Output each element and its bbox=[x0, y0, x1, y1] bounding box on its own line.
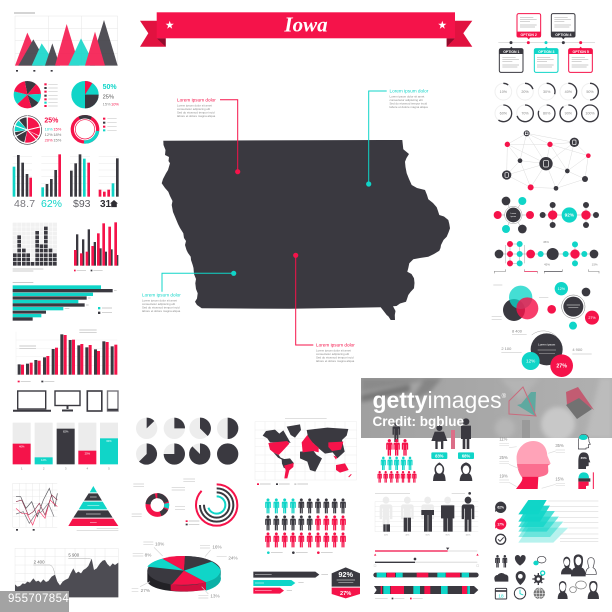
3D pie chart: 10% bbox=[155, 542, 164, 547]
pie charts: 50% bbox=[103, 84, 117, 91]
bubble summary: Lorem ipsum bbox=[538, 342, 556, 346]
pie charts: 15% bbox=[53, 137, 62, 142]
circular progress gauges: 30% bbox=[543, 90, 551, 94]
bubble summary: 12% bbox=[526, 359, 535, 364]
paired bar chart bbox=[74, 222, 118, 271]
stacked column chart: 5 bbox=[108, 466, 110, 470]
circular progress gauges: 100% bbox=[585, 112, 595, 116]
area line chart bbox=[15, 548, 118, 597]
watermark band background bbox=[361, 378, 612, 441]
callout: top left: Lorem ipsum dolor sit amet bbox=[177, 104, 212, 108]
arrow bars with hexagon bbox=[253, 567, 360, 598]
stacked column chart: 3 bbox=[65, 466, 67, 470]
watermark text bbox=[372, 387, 507, 429]
stacked column chart: 1 bbox=[21, 466, 23, 470]
people pyramid and gender comparison: 83% bbox=[435, 453, 444, 458]
venn diagram bbox=[492, 285, 548, 321]
image id strip: 955707854 bbox=[8, 593, 69, 605]
big numbers: $93 bbox=[73, 198, 91, 210]
circle diagrams: 92% bbox=[565, 213, 575, 218]
badges: 62% bbox=[497, 506, 504, 510]
circular progress gauges bbox=[495, 83, 598, 122]
3D pie chart: 27% bbox=[141, 588, 150, 593]
options timeline: OPTION 3 bbox=[538, 50, 555, 54]
3D pie chart: 24% bbox=[228, 555, 238, 560]
watermark text: Credit: bgblue bbox=[372, 414, 464, 429]
big numbers: 62% bbox=[41, 198, 62, 210]
callout: bottom centre: Lorem ipsum dolor bbox=[316, 343, 355, 348]
human figure comparison chart: 60% bbox=[426, 534, 430, 536]
callout: top left: labore et dolore magna aliqua bbox=[177, 114, 216, 118]
circle diagrams: Lorem bbox=[511, 212, 516, 215]
icon set: 18 bbox=[498, 594, 504, 599]
callout: top right: Lorem ipsum dolor bbox=[390, 89, 429, 94]
layered stack chart bbox=[518, 500, 598, 543]
3D pie chart bbox=[132, 542, 238, 598]
callout: top right: Sed do eiusmod tempor incid bbox=[390, 102, 427, 106]
callout: top right bbox=[366, 89, 429, 187]
circular progress gauges: 90% bbox=[565, 112, 573, 116]
people pyramid and gender comparison bbox=[377, 418, 474, 483]
title banner bbox=[140, 12, 472, 47]
human figure comparison chart: 40% bbox=[405, 534, 410, 536]
human figure comparison chart: 100% bbox=[465, 534, 471, 536]
circular progress gauges: 40% bbox=[565, 90, 573, 94]
arrow bars with hexagon: 92% bbox=[338, 570, 353, 579]
callout: lower left: Sed do eiusmod tempor incid bbox=[142, 306, 180, 310]
map of Iowa bbox=[162, 140, 450, 320]
head infographic: 11% bbox=[499, 437, 508, 442]
options timeline: OPTION 4 bbox=[555, 33, 572, 37]
pie charts: 15% bbox=[103, 102, 111, 107]
stacked column chart: 60% bbox=[106, 439, 112, 443]
stacked column chart bbox=[13, 423, 118, 470]
callout: top right: labore et dolore magna aliqua bbox=[390, 105, 428, 109]
big numbers: 31 bbox=[100, 199, 112, 210]
pie charts: 10% bbox=[45, 127, 53, 132]
network diagram bbox=[502, 130, 591, 191]
bubble summary: 2 100 bbox=[501, 346, 512, 351]
head infographic: 35% bbox=[581, 456, 587, 460]
callout: top left: Sed do eiusmod tempor incid bbox=[177, 110, 215, 114]
3D pie chart: 13% bbox=[210, 593, 220, 598]
circle diagrams: 45% bbox=[543, 240, 549, 244]
callout: top right: consectetur adipiscing elit bbox=[390, 98, 423, 102]
horizontal bar chart bbox=[13, 282, 117, 321]
stacked column chart: 40% bbox=[19, 444, 25, 448]
title banner: Iowa bbox=[283, 12, 328, 36]
callout: lower left: Lorem ipsum dolor bbox=[142, 293, 181, 298]
callout: lower left bbox=[142, 271, 236, 313]
people grid chart bbox=[265, 498, 346, 554]
callout: bottom centre bbox=[293, 253, 355, 363]
bubble cluster bbox=[547, 282, 599, 330]
line chart bbox=[13, 483, 57, 531]
callout: bottom centre: Sed do eiusmod tempor incid bbox=[316, 356, 354, 360]
stacked column chart: 2 bbox=[43, 466, 45, 470]
bubble summary: 4 900 bbox=[572, 347, 583, 352]
3D pie chart: 16% bbox=[212, 545, 222, 550]
options timeline: OPTION 2 bbox=[521, 33, 537, 37]
human figure comparison chart: 20% bbox=[384, 534, 388, 536]
pie charts: 12% bbox=[45, 132, 53, 137]
options timeline: OPTION 1 bbox=[503, 50, 520, 54]
stacked column chart: 4 bbox=[86, 466, 88, 470]
area line chart: 5 900 bbox=[68, 553, 80, 558]
circular progress gauges: 60% bbox=[500, 112, 508, 116]
donut chart bbox=[132, 484, 185, 517]
callout: bottom centre: Lorem ipsum dolor sit amet bbox=[316, 348, 351, 352]
vertical bar charts bbox=[13, 154, 119, 197]
stacked column chart: 82% bbox=[63, 429, 69, 433]
callout: lower left: labore et dolore magna aliqua bbox=[142, 309, 181, 313]
pie charts bbox=[13, 83, 119, 144]
callout: lower left: Lorem ipsum dolor sit amet bbox=[142, 298, 177, 302]
stacked column chart: 12% bbox=[41, 458, 47, 462]
badges bbox=[495, 502, 506, 544]
stacked column chart: 25% bbox=[85, 451, 91, 455]
head infographic: 25% bbox=[499, 455, 508, 460]
grouped bar chart bbox=[16, 330, 117, 382]
callout: bottom centre: consectetur adipiscing elit bbox=[316, 352, 349, 356]
circular progress gauges: 50% bbox=[586, 90, 594, 94]
progress sliders and striped bars bbox=[373, 548, 479, 599]
concentric ring chart bbox=[183, 479, 237, 526]
circle diagrams: 45% bbox=[544, 262, 550, 266]
bubble summary: 8 400 bbox=[512, 329, 523, 334]
icons: devices bbox=[13, 391, 118, 411]
pyramid chart bbox=[68, 486, 118, 531]
head infographic bbox=[499, 434, 593, 490]
people pyramid and gender comparison: 68% bbox=[462, 453, 470, 458]
icon set bbox=[494, 555, 546, 599]
circular progress gauges: 70% bbox=[521, 112, 529, 116]
callout: bottom centre: labore et dolore magna aliqua bbox=[316, 359, 355, 363]
bubble cluster: 27% bbox=[588, 316, 596, 320]
area triangle chart bbox=[14, 13, 118, 72]
image id strip bbox=[0, 591, 69, 612]
circular progress gauges: 80% bbox=[543, 112, 551, 116]
callout: top right: Lorem ipsum dolor sit amet bbox=[390, 94, 425, 98]
bubble summary: 27% bbox=[556, 364, 567, 370]
big numbers bbox=[14, 198, 118, 210]
pie charts: 18% bbox=[53, 132, 62, 137]
watermark text: gettyimages bbox=[372, 387, 502, 413]
head infographic: 15% bbox=[555, 477, 564, 482]
watermark text: ® bbox=[502, 393, 507, 400]
pie charts: 25% bbox=[44, 118, 59, 125]
callout: top left: consectetur adipiscing elit bbox=[177, 107, 210, 111]
pie charts: 20% bbox=[45, 137, 53, 142]
arrow bars with hexagon: 27% bbox=[340, 591, 351, 597]
pie charts: 10% bbox=[111, 102, 119, 107]
badges: 17% bbox=[497, 522, 504, 526]
pie charts: 25% bbox=[103, 95, 114, 101]
area line chart: 2 400 bbox=[34, 559, 45, 564]
human figure comparison chart bbox=[375, 492, 478, 536]
big numbers: 48.7 bbox=[14, 198, 35, 210]
circle diagrams: 15% bbox=[592, 262, 598, 266]
bubble summary bbox=[501, 329, 592, 377]
fraction pies bbox=[136, 418, 238, 465]
circular progress gauges: 20% bbox=[521, 90, 529, 94]
circular progress gauges: 10% bbox=[500, 90, 508, 94]
3D pie chart: 8% bbox=[145, 553, 151, 558]
circle diagrams: ipsum bbox=[511, 216, 516, 218]
pie charts: 15% bbox=[53, 127, 62, 132]
human figure comparison chart: 80% bbox=[446, 534, 450, 536]
options timeline bbox=[498, 14, 595, 72]
callout: top left bbox=[177, 97, 240, 174]
callout: lower left: consectetur adipiscing elit bbox=[142, 302, 175, 306]
square grid chart bbox=[13, 223, 57, 271]
people icons bbox=[558, 554, 599, 599]
callout: top left: Lorem ipsum dolor bbox=[177, 97, 216, 102]
world map bbox=[255, 418, 357, 485]
bubble cluster: 12% bbox=[558, 287, 566, 291]
circle diagrams bbox=[494, 197, 599, 273]
head infographic: 35% bbox=[555, 443, 564, 448]
options timeline: OPTION 5 bbox=[573, 50, 589, 54]
head infographic: 19% bbox=[499, 473, 508, 478]
